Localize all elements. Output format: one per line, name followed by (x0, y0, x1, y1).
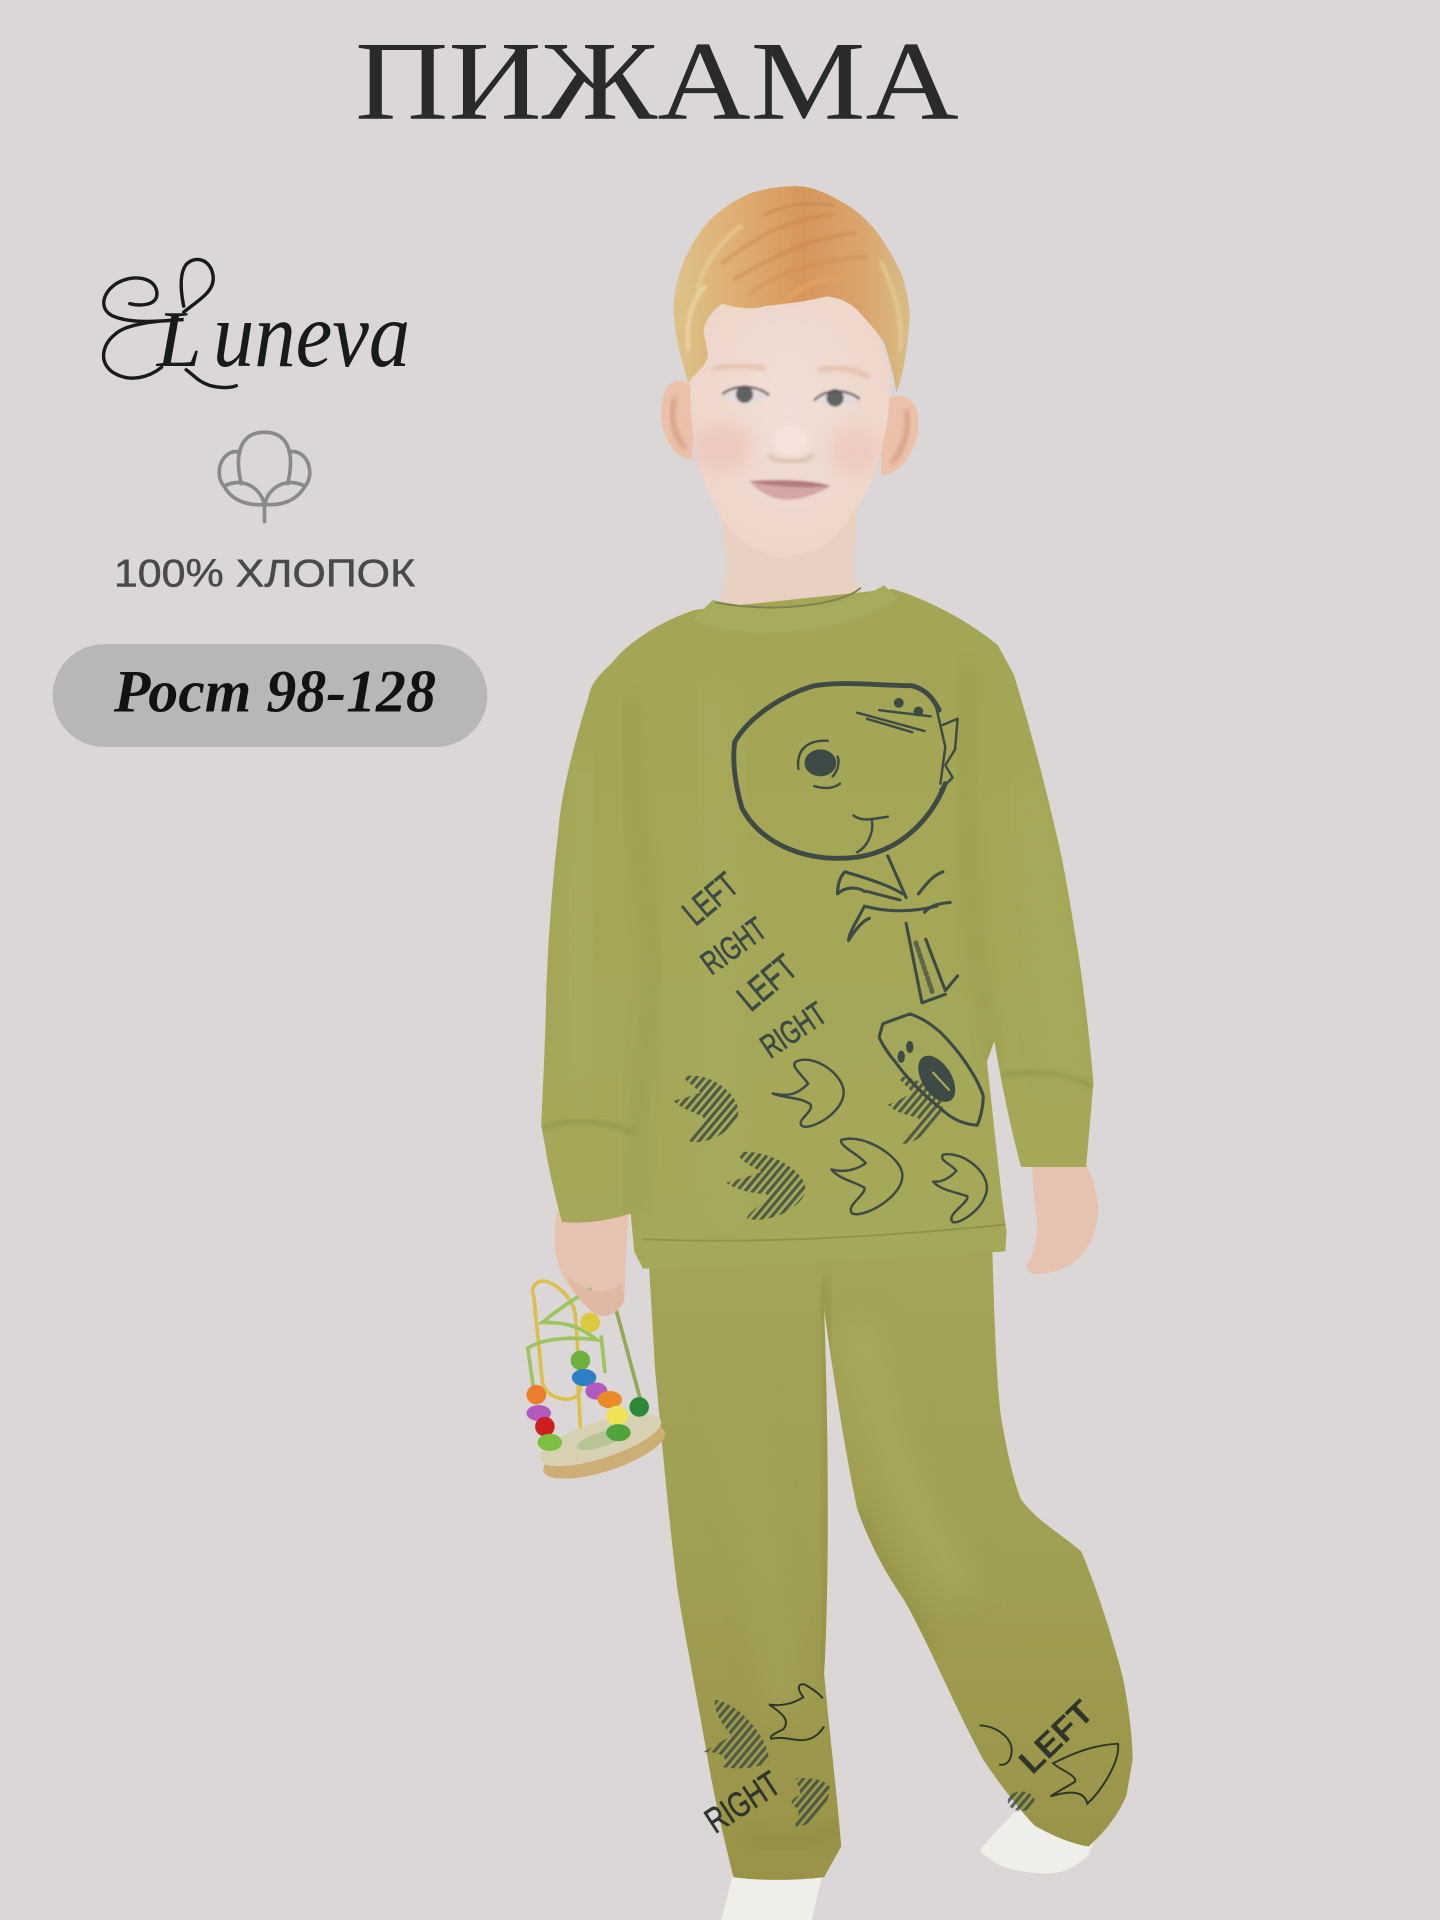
fingers over toy (566, 1273, 624, 1316)
pants print: RIGHT word: RIGHT (698, 1763, 787, 1841)
dino neck and arms (838, 856, 950, 940)
eyes and brows (713, 365, 869, 407)
footprint C (933, 1154, 987, 1222)
pants print: outlined footprint upper (769, 1684, 824, 1740)
pants print: footprint curve (980, 1725, 1012, 1765)
material label: 100% ХЛОПОК (114, 553, 415, 596)
dino mouth (853, 816, 888, 852)
footprint D (673, 1076, 738, 1142)
title: ПИЖАМА (355, 20, 959, 144)
pants print: dino footprints and words (698, 1684, 1118, 1841)
ears (661, 381, 918, 475)
face (690, 288, 889, 557)
toy base (534, 1403, 671, 1490)
pants print: outlined footprint right (1051, 1744, 1118, 1804)
collar (693, 585, 896, 633)
socks (721, 1800, 1111, 1920)
outlined footprints (773, 1060, 987, 1222)
infographic canvas (52, 44, 1133, 1920)
dino crest (936, 704, 958, 790)
size badge: Рост 98-128 (113, 658, 436, 724)
LEFT 1: LEFT (675, 865, 746, 933)
dino print (734, 684, 983, 1125)
toy: bead maze (527, 1281, 671, 1490)
pants (648, 1237, 1133, 1880)
dino eye (798, 741, 840, 788)
LEFT 2: LEFT (729, 946, 805, 1019)
pants print: hatched footprint lower (792, 1778, 830, 1827)
pants print: hatched footprint small (1008, 1791, 1035, 1811)
toy beads (527, 1313, 649, 1451)
long-sleeve top (541, 585, 1093, 1269)
footprint E (726, 1152, 806, 1220)
brand logo: Luneva (104, 259, 410, 388)
shirt print words (675, 865, 834, 1066)
dino foot (879, 1014, 983, 1125)
toy wires (528, 1281, 640, 1427)
footprint A (773, 1060, 844, 1127)
brand logo: Luneva: uneva (213, 284, 410, 387)
right hand (1027, 1163, 1098, 1274)
footprint F (888, 1076, 943, 1144)
boy wearing pyjamas (527, 186, 1133, 1920)
pants print: hatched footprint upper (703, 1700, 769, 1768)
dino head outline (734, 684, 945, 858)
hair (673, 186, 910, 393)
pants print: LEFT word: LEFT (1012, 1693, 1101, 1781)
size badge (53, 644, 487, 747)
icon: cotton boll (219, 432, 310, 522)
dino nostrils (857, 698, 931, 732)
mouth (749, 480, 830, 500)
left hand (555, 1206, 629, 1316)
dino body hatch (906, 923, 958, 1003)
RIGHT 2: RIGHT (754, 995, 834, 1066)
brand logo: Luneva: L (156, 295, 202, 384)
nose (769, 425, 813, 462)
footprint B (831, 1139, 902, 1214)
neck (718, 502, 862, 612)
RIGHT 1: RIGHT (694, 911, 774, 982)
hatched footprints (673, 1076, 943, 1220)
